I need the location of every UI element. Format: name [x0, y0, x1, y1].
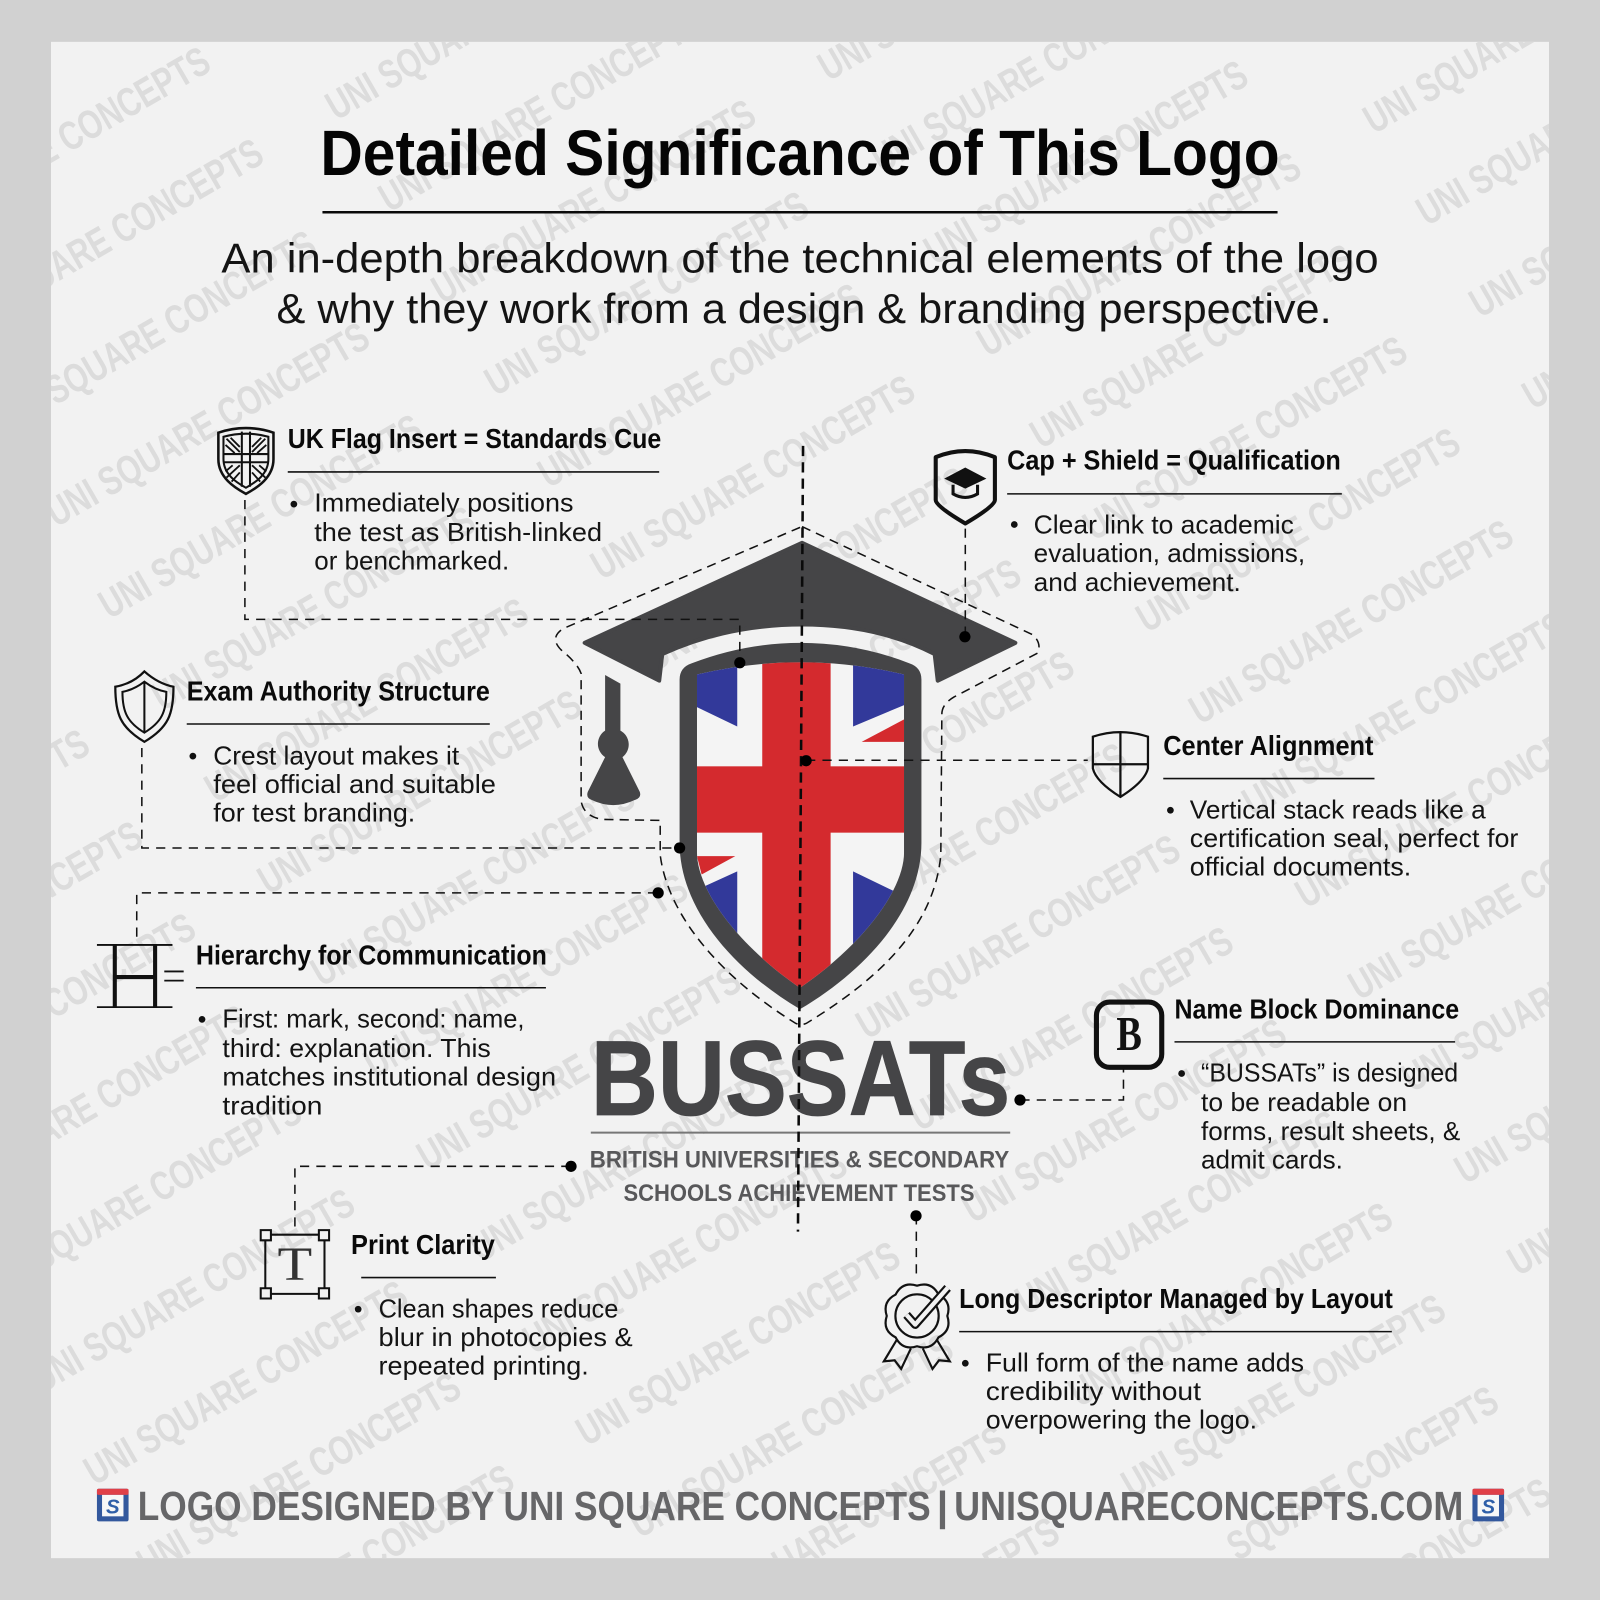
heading: Hierarchy for Communication [196, 939, 547, 970]
text: UNI SQUARE CONCEPTS [849, 826, 1188, 1048]
icon: letter B: B [1116, 1006, 1142, 1061]
heading: UK Flag Insert = Standards Cue [288, 423, 661, 454]
bullet text: overpowering the logo. [986, 1407, 1257, 1435]
heading: Center Alignment [1163, 730, 1373, 761]
text: UNI SQUARE CONCEPTS [796, 734, 1135, 956]
bullet text: First: mark, second: name, [222, 1006, 524, 1034]
text: E CONCEPTS [329, 1456, 521, 1593]
bullet text: third: explanation. This [222, 1035, 491, 1063]
bullet text: Clear link to academic [1034, 512, 1294, 540]
bullet text: to be readable on [1201, 1089, 1407, 1117]
heading: Exam Authority Structure [187, 676, 490, 707]
bullet text: Immediately positions [314, 490, 573, 518]
bullet text: evaluation, admissions, [1034, 540, 1305, 568]
bullet text: feel official and suitable [213, 771, 496, 799]
bullet text: blur in photocopies & [379, 1324, 633, 1352]
heading: Long Descriptor Managed by Layout [959, 1283, 1393, 1314]
connector: center alignment [801, 755, 1088, 766]
text: UNI SQUARE CONCEPTS [250, 681, 589, 903]
icon: text frame [261, 1230, 329, 1298]
logo: dashed outline [556, 527, 1039, 1024]
text: UNI SQUARE CONCEPTS [1076, 327, 1415, 549]
footer credit: UNISQUARECONCEPTS.COM [954, 1483, 1463, 1529]
text: UNI SQUARE CONCEPTS [689, 550, 1028, 772]
text: EPTS [976, 1508, 1067, 1587]
icon: cap in shield [936, 451, 995, 523]
heading: Cap + Shield = Qualification [1007, 444, 1341, 475]
bullet text [1011, 512, 1305, 597]
panel: long descriptor [884, 1283, 1393, 1435]
icon: letter B [1096, 1002, 1162, 1067]
heading: Print Clarity [351, 1229, 496, 1260]
footer credit [138, 1483, 1463, 1529]
text: UNI SQUARE CONCEPTS [129, 1364, 468, 1586]
bullet text [355, 1295, 633, 1380]
bullet text: official documents. [1190, 854, 1411, 882]
panel: cap and shield [936, 444, 1342, 597]
text: UNI SQUARE CONCEPTS [583, 366, 922, 588]
panel: center alignment [1093, 730, 1519, 882]
text: UNI SQUARE CONCEPTS [462, 1049, 801, 1271]
text: UNI SQUARE CONCEPTS [76, 1272, 415, 1494]
text: UNI SQUARE CONCEPTS [1008, 1102, 1347, 1324]
heading: Name Block Dominance [1174, 993, 1459, 1024]
text: UNI SQUARE CONCEPTS [1114, 1285, 1453, 1507]
text: UNI SQUARE CONCEPTS [477, 183, 816, 405]
logo: tassel [587, 675, 640, 805]
text: UNI SQUARE CONCEPTS [1235, 603, 1574, 825]
bullet text: Crest layout makes it [213, 742, 459, 770]
central logo [556, 527, 1039, 1207]
panel: exam authority structure [115, 671, 496, 827]
footer [97, 1483, 1504, 1529]
text: UNI SQUARE CONCEPTS [144, 497, 483, 719]
connector: long descriptor [910, 1210, 922, 1281]
bullet text: credibility without [986, 1378, 1201, 1406]
logo: full name [590, 1146, 1009, 1207]
connector: exam authority [142, 748, 685, 854]
text: UNI SQUARE CONCEPTS [1129, 419, 1468, 641]
footer credit: LOGO DESIGNED BY UNI SQUARE CONCEPTS [138, 1483, 931, 1529]
text: UNI SQUARE CONCEPTS [1061, 1194, 1400, 1416]
bullet text: Clean shapes reduce [379, 1295, 618, 1323]
bullet text [1167, 796, 1519, 882]
text: UNI SQUARE CONCEPTS [916, 52, 1255, 274]
text: UNI SQUARE CONCEPTS [91, 406, 430, 628]
bullet text: the test as British-linked [314, 519, 602, 547]
bullet text [189, 742, 496, 827]
panel: name block dominance [1096, 993, 1460, 1174]
center axis line [798, 446, 803, 1232]
panel: print clarity [261, 1229, 633, 1380]
bullet text: forms, result sheets, & [1201, 1118, 1460, 1146]
bullet text: “BUSSATs” is designed [1201, 1060, 1458, 1088]
subtitle [221, 234, 1379, 332]
icon: left brand mark: S [106, 1496, 120, 1518]
icon: quartered shield [1093, 732, 1148, 797]
icon: right brand mark [1472, 1489, 1504, 1521]
text: UNI SQUARE CONCEPTS [1023, 235, 1362, 457]
text: SQUARE CONCEPTS [1219, 1377, 1506, 1569]
logo: union flag [694, 658, 908, 995]
text: UNI SQUARE CONCEPTS [530, 275, 869, 497]
bullet text: admit cards. [1201, 1146, 1343, 1174]
bullet text [1178, 1060, 1460, 1174]
bullet text [291, 490, 602, 575]
text: UNI SQUARE CONCEPTS [303, 773, 642, 995]
text: CONCEPTS [1391, 1469, 1559, 1592]
footer credit: | [937, 1483, 948, 1529]
icon: approval badge [884, 1284, 950, 1369]
icon: flag shield [218, 428, 273, 494]
text: UNI SQUARE CONCEPTS [1182, 511, 1521, 733]
bullet text: Vertical stack reads like a [1190, 796, 1487, 824]
title: Detailed Significance of This Logo [320, 117, 1280, 189]
text: UNI SQUARE CONCEPTS [356, 865, 695, 1087]
connector: print clarity [295, 1161, 577, 1228]
text: UNI SQUARE CONCEPTS [622, 1325, 961, 1547]
logo: shield [680, 643, 921, 1009]
text: UNI SQUARE CONCEPTS [742, 642, 1082, 864]
bullet text [199, 1006, 556, 1120]
icon: H with rules [97, 945, 184, 1007]
bullet text: repeated printing. [379, 1352, 589, 1380]
text: UNI SQUARE CONCEPTS [371, 0, 710, 221]
subtitle: An in-depth breakdown of the technical elements of the logo [221, 234, 1379, 281]
text: UNI SQUARE CONCEPTS [902, 918, 1241, 1140]
connector: UK flag [245, 500, 745, 668]
logo: wordmark: BUSSATs [591, 1018, 1010, 1138]
text: UNI SQUARE CONCEPTS [516, 1141, 855, 1363]
text: UNI SQUARE CONCEPTS [38, 314, 377, 536]
icon: left brand mark [97, 1489, 129, 1521]
text: UNI SQUARE CONCEPTS [23, 1180, 362, 1402]
bullet text: or benchmarked. [314, 547, 509, 575]
bullet text: for test branding. [213, 799, 415, 827]
bullet text: tradition [222, 1092, 322, 1120]
text: UARE CONCEPTS [765, 1417, 1014, 1587]
bullet text: certification seal, perfect for [1190, 825, 1519, 853]
icon: text frame: T [278, 1238, 312, 1291]
logo: full name: BRITISH UNIVERSITIES & SECONDARY [590, 1146, 1009, 1173]
bullet text: matches institutional design [222, 1064, 556, 1092]
text: UNI SQUARE CONCEPTS [409, 957, 748, 1179]
bullet text: and achievement. [1034, 569, 1241, 597]
logo: graduation cap [585, 543, 1015, 681]
bullet text: Full form of the name adds [986, 1349, 1304, 1377]
connector: cap and shield [959, 529, 971, 642]
panel: hierarchy for communication [97, 939, 556, 1120]
text: UNI SQUARE CONCEPTS [424, 91, 763, 313]
panel: UK flag insert [218, 423, 661, 575]
connector: name block [1014, 1069, 1123, 1106]
text: UNI SQUARE CONCEPTS [636, 458, 975, 680]
connector: hierarchy [137, 887, 664, 937]
logo: full name: SCHOOLS ACHIEVEMENT TESTS [623, 1180, 974, 1207]
text: UNI SQUARE CONCEPTS [969, 143, 1309, 365]
text: UNI SQUARE CONCEPTS [569, 1233, 908, 1455]
icon: right brand mark: S [1481, 1496, 1495, 1518]
icon: shield [115, 671, 173, 742]
bullet text [962, 1349, 1304, 1435]
subtitle: & why they work from a design & branding perspective. [277, 285, 1332, 332]
text: UNI SQUARE CONCEPTS [197, 589, 536, 811]
text: UNI SQUARE CONCEPTS [955, 1010, 1294, 1232]
